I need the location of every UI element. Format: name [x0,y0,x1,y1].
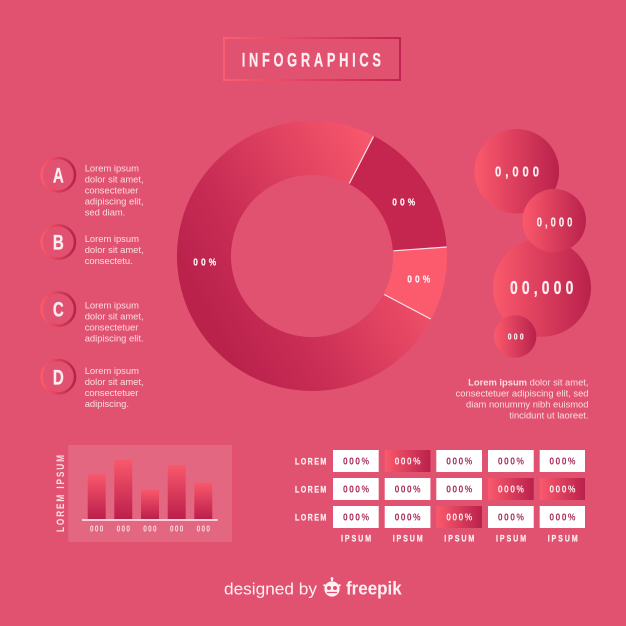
label: small share: 00% [407,273,431,286]
cell values: 000% [446,484,472,495]
cell values: 000% [549,512,575,523]
bubble 0,000 small [522,189,586,252]
legend item A: sed diam. [85,207,125,218]
cell values: 000% [343,512,369,523]
label: medium share: 00% [392,197,416,209]
cell values: 000% [395,456,421,467]
legend item D: consectetuer [85,387,138,398]
cell values: 000% [343,456,369,467]
bar value labels [90,524,210,534]
column labels: IPSUM [496,532,526,544]
bar value labels: 000 [90,524,103,534]
axis [82,519,218,521]
bar chart [68,445,232,542]
legend item B: dolor sit amet, [85,244,144,255]
column labels: IPSUM [393,532,423,544]
bubble 0,000 large [474,129,559,214]
cell values: 000% [498,512,524,523]
text block: bubble description: dolor sit amet, [527,377,588,388]
bar value labels: 000 [170,524,183,534]
legend item C: C [53,297,64,321]
bar value labels: 000 [197,524,210,534]
legend item A: A [53,163,64,187]
legend item C: dolor sit amet, [85,310,144,322]
text block: bubble description: diam nonummy nibh euismod [466,399,588,410]
footer credit: designed by [224,579,318,598]
column labels: IPSUM [548,532,578,544]
vertical axis title: LOREM IPSUM [55,455,67,532]
cell values: 000% [549,484,575,495]
label: large share: 00% [193,257,217,269]
cell values: 000% [343,484,369,495]
legend item A [42,158,144,218]
segment: large share [177,121,431,391]
table cells [333,450,585,528]
bar value labels: 000 [117,524,130,534]
data table [295,450,585,544]
legend item A: dolor sit amet, [85,174,144,185]
legend item B [42,225,144,266]
title [224,38,400,80]
row labels [295,455,326,523]
footer credit: freepik [346,578,403,598]
bubble 00,000 [493,239,591,337]
bar value labels: 000 [143,524,157,534]
bubble 000 [494,315,536,358]
legend item B: consectetu. [85,255,133,266]
column labels: IPSUM [444,532,474,544]
bars [88,460,212,519]
bubble 0,000 large: 0,000 [495,163,539,180]
legend item A: Lorem ipsum [85,163,139,174]
icon: freepik logo [324,577,340,597]
cell values: 000% [446,512,472,523]
cell values: 000% [498,484,524,495]
legend item C: adipiscing elit. [85,332,144,344]
row labels: LOREM [295,455,326,467]
legend item D: dolor sit amet, [85,376,144,387]
legend item D: D [53,365,64,389]
cell values: 000% [498,456,524,467]
title: INFOGRAPHICS [242,49,381,71]
legend item C: Lorem ipsum [85,300,139,310]
legend item D: adipiscing. [85,398,129,409]
donut chart [177,121,447,391]
text block: bubble description: consectetuer adipiscing elit, sed [456,388,588,399]
segment separators [349,136,447,319]
segment: medium share [349,136,447,251]
bubble 000: 000 [508,332,524,342]
cell values: 000% [395,512,421,523]
legend item A: consectetuer [85,185,138,196]
legend item B: B [53,230,64,254]
cell values: 000% [549,456,575,467]
column labels [341,532,578,544]
legend item C [42,292,144,344]
legend item D [42,360,144,409]
bubble 00,000: 00,000 [510,278,573,299]
legend item B: Lorem ipsum [85,233,139,244]
text block: bubble description: tincidunt ut laoreet. [509,410,588,420]
row labels: LOREM [295,483,326,495]
legend item D: Lorem ipsum [85,365,139,376]
column labels: IPSUM [341,532,371,544]
footer credit [224,577,403,598]
bubble 0,000 small: 0,000 [537,217,572,230]
segment: small share [384,247,447,319]
legend item C: consectetuer [85,322,138,332]
cell values: 000% [395,484,421,495]
panel: legend list [42,158,144,409]
cell values [343,456,575,523]
text block: bubble description: Lorem ipsum [468,377,527,388]
cell values: 000% [446,456,472,467]
chart panel [68,445,232,542]
legend item A: adipiscing elit, [85,196,144,207]
row labels: LOREM [295,511,326,523]
bubble chart [474,129,591,358]
